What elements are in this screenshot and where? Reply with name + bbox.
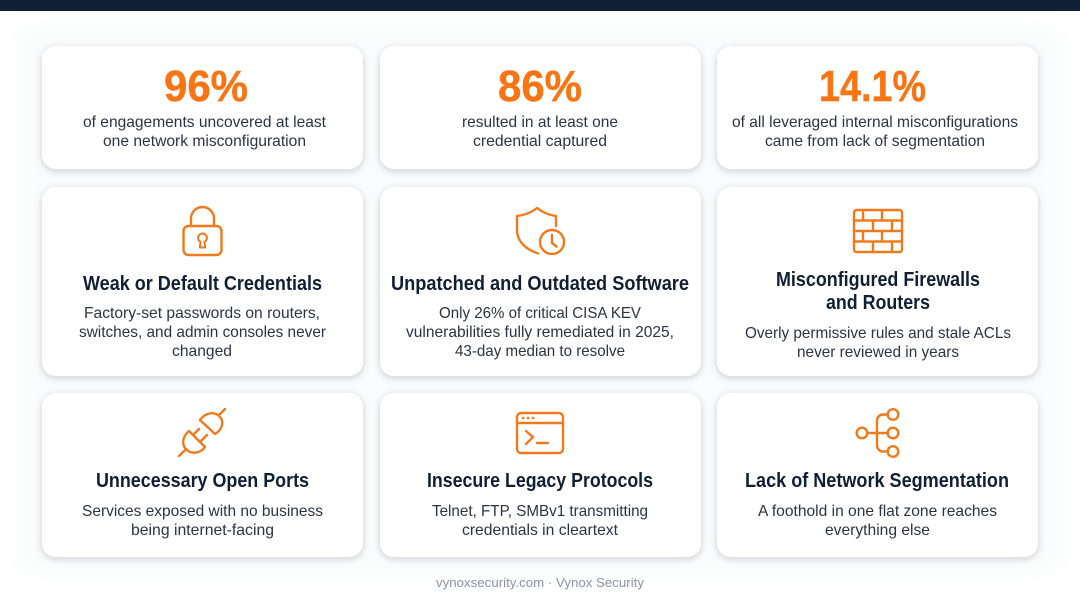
stat description: credential captured [473, 133, 607, 150]
icon: padlock [184, 207, 222, 255]
panel: lack of network segmentation [717, 393, 1038, 557]
stat description: one network misconfiguration [103, 133, 306, 150]
panel: weak or default credentials [42, 187, 363, 376]
description [406, 305, 674, 360]
icon: shield with clock [517, 208, 564, 254]
heading: Unpatched and Outdated Software [391, 273, 689, 295]
panel: unpatched and outdated software [380, 187, 701, 376]
description: vulnerabilities fully remediated in 2025, [406, 324, 674, 341]
stat description [83, 114, 327, 150]
heading: and Routers [826, 292, 930, 314]
stat description [462, 114, 618, 150]
heading: Unnecessary Open Ports [96, 470, 309, 492]
description: Services exposed with no business [82, 503, 323, 520]
panel: 86% stat [380, 46, 701, 169]
description: A foothold in one flat zone reaches [758, 503, 997, 520]
stat description [732, 114, 1018, 150]
heading: Misconfigured Firewalls [776, 269, 980, 291]
icon: terminal window [517, 413, 563, 453]
icon: brick wall [854, 210, 902, 252]
description: 43-day median to resolve [455, 343, 625, 360]
icon: unplugged connector [179, 409, 225, 456]
top bar [0, 0, 1080, 11]
description: never reviewed in years [797, 344, 959, 361]
heading: Insecure Legacy Protocols [427, 470, 653, 492]
description [82, 503, 323, 539]
heading: Weak or Default Credentials [83, 273, 322, 295]
description [745, 325, 1011, 361]
description: credentials in cleartext [462, 522, 619, 539]
heading [776, 269, 980, 314]
stat description: resulted in at least one [462, 114, 618, 131]
description: Telnet, FTP, SMBv1 transmitting [432, 503, 648, 520]
stat description: of all leveraged internal misconfigurations [732, 114, 1018, 131]
panel: insecure legacy protocols [380, 393, 701, 557]
description: everything else [825, 522, 930, 539]
description [758, 503, 997, 539]
stat description: came from lack of segmentation [765, 133, 985, 150]
stat number 14.1%: 14.1% [819, 62, 926, 111]
description: Factory-set passwords on routers, [84, 305, 320, 322]
stat number 86%: 86% [498, 62, 582, 111]
description [79, 305, 327, 360]
description: changed [172, 343, 232, 360]
description: Only 26% of critical CISA KEV [439, 305, 641, 322]
panel: 96% stat [42, 46, 363, 169]
panel: 14.1% stat [717, 46, 1038, 169]
description: Overly permissive rules and stale ACLs [745, 325, 1011, 342]
panel: unnecessary open ports [42, 393, 363, 557]
heading: Lack of Network Segmentation [745, 470, 1009, 492]
stat description: of engagements uncovered at least [83, 114, 327, 131]
description: being internet-facing [131, 522, 274, 539]
description: switches, and admin consoles never [79, 324, 327, 341]
stat number 96%: 96% [164, 62, 248, 111]
panel: misconfigured firewalls and routers [717, 187, 1038, 376]
icon: branching network [857, 409, 898, 457]
footer: vynoxsecurity.com · Vynox Security [436, 576, 645, 590]
description [432, 503, 648, 539]
